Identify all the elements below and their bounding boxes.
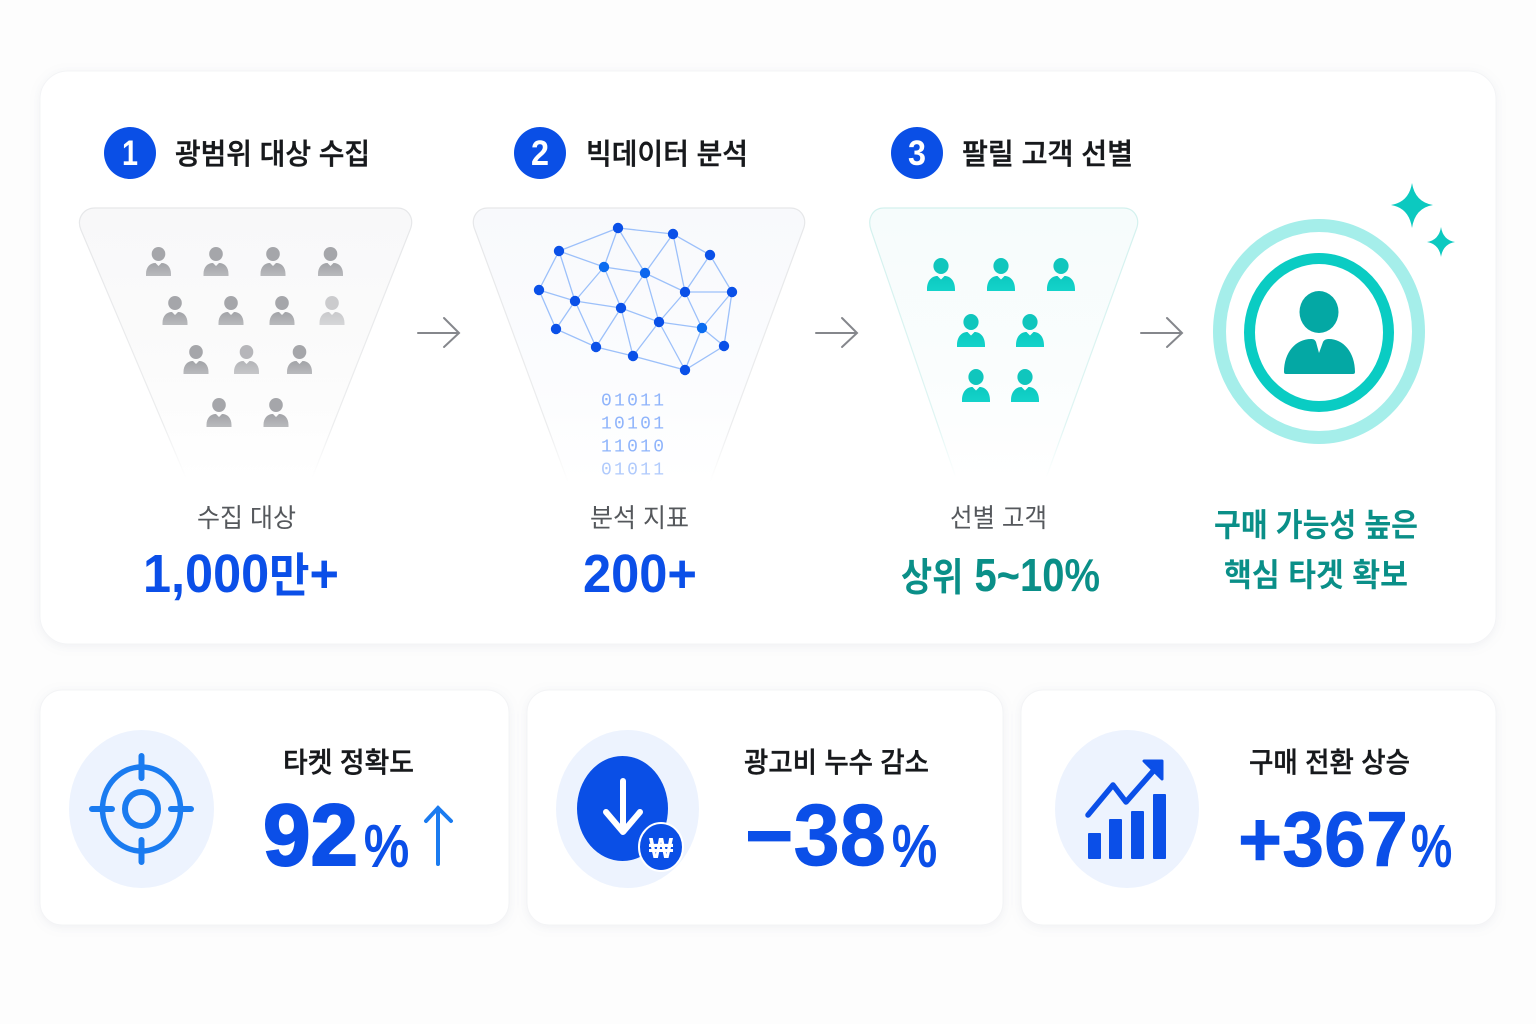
step 2 heading	[514, 127, 748, 179]
panel: funnel process	[40, 71, 1496, 644]
step 3 heading: 3	[908, 134, 926, 173]
funnel 1: gray crowd	[79, 208, 412, 478]
panel: target accuracy	[40, 690, 509, 925]
icon: cost down: ₩	[649, 833, 674, 865]
arrow 3	[1141, 318, 1182, 347]
panel: ad waste reduction	[527, 690, 1003, 925]
metric: analysis indicators: 분석 지표	[590, 503, 689, 533]
arrow 1	[418, 318, 459, 347]
result text: 구매 가능성 높은	[1214, 507, 1418, 543]
value: %	[892, 814, 937, 879]
step 2 heading: 빅데이터 분석	[586, 138, 748, 171]
binary digits: 10101	[601, 414, 664, 434]
metric: analysis indicators	[583, 503, 697, 604]
step 1 heading	[104, 127, 370, 179]
binary digits: 01011	[601, 392, 664, 412]
icon: growth chart	[1055, 730, 1199, 888]
value: %	[364, 814, 409, 879]
value: +367	[1238, 795, 1408, 883]
value	[263, 787, 409, 884]
funnel 3: selected customers	[870, 208, 1138, 478]
metric: collected audience: 수집 대상	[197, 503, 296, 533]
funnel 2: neural network and binary	[473, 208, 805, 482]
step 1 heading: 광범위 대상 수집	[175, 138, 370, 171]
metric: analysis indicators: 200+	[583, 544, 697, 604]
metric: collected audience: 1,000만+	[143, 544, 339, 604]
icon: cost down	[556, 730, 699, 888]
binary digits	[601, 392, 664, 480]
binary digits: 11010	[601, 438, 664, 458]
step 3 heading: 팔릴 고객 선별	[962, 138, 1133, 171]
result text: 핵심 타겟 확보	[1224, 557, 1408, 593]
step 2 heading: 2	[531, 134, 549, 173]
value: %	[1411, 814, 1452, 879]
icon: core target customer	[1220, 183, 1455, 438]
icon: crosshair target	[69, 730, 214, 888]
metric: selected customers	[901, 503, 1100, 601]
value: 92	[263, 787, 358, 884]
value: −38	[745, 787, 886, 884]
title: 타켓 정확도	[283, 747, 414, 778]
arrow 2	[816, 318, 857, 347]
metric: collected audience	[143, 503, 339, 604]
icon: up arrow	[426, 808, 451, 864]
step 3 heading	[891, 127, 1133, 179]
result text	[1214, 507, 1418, 593]
metric: selected customers: 선별 고객	[950, 503, 1047, 533]
metric: selected customers: 상위 5~10%	[901, 549, 1100, 601]
icon: sparkles	[1391, 183, 1455, 257]
step 1 heading: 1	[122, 134, 138, 173]
title: 구매 전환 상승	[1249, 747, 1410, 778]
binary digits: 01011	[601, 460, 664, 480]
network nodes	[534, 223, 737, 375]
network lines	[539, 228, 732, 370]
panel: conversion increase	[1021, 690, 1496, 925]
title: 광고비 누수 감소	[744, 747, 929, 778]
